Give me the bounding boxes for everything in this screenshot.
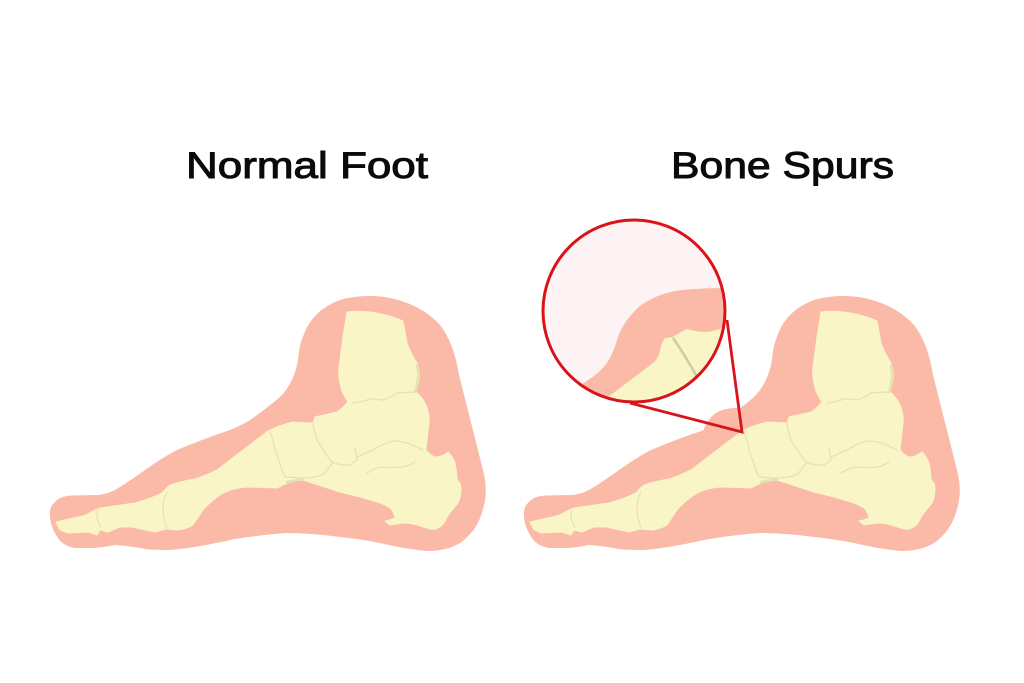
illustration: foot with bone spur [524,296,960,551]
illustration: normal foot [50,296,486,551]
magnified callout: bone spur [543,220,730,410]
callout pointer [630,320,742,432]
magnified content [582,288,724,400]
title: Bone Spurs: Bone Spurs [671,145,894,186]
foot bones [56,311,461,535]
magnified soft tissue [582,288,724,397]
foot soft tissue [50,296,486,551]
bone joints [97,365,423,528]
lens ring [543,220,725,402]
title: Normal Foot: Normal Foot [186,145,429,186]
magnified bone [608,328,722,400]
magnified bone joint [673,338,697,377]
bone spur bump [703,408,754,436]
foot soft tissue [524,296,960,551]
bone joints [571,365,897,528]
foot bones [530,311,935,535]
lens background [543,220,725,402]
